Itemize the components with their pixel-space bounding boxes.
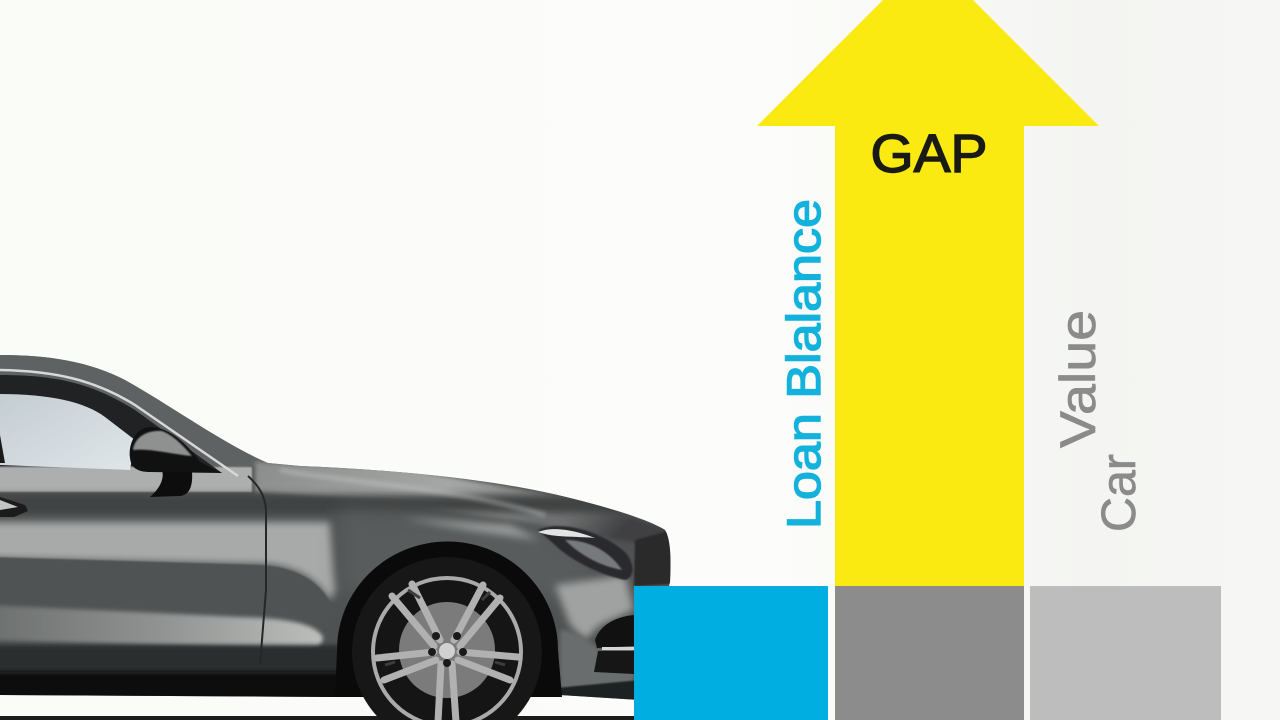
car body (0, 340, 680, 710)
value label: Value (1050, 310, 1106, 448)
lower dark sill (0, 645, 340, 675)
bumper shadow (561, 680, 634, 700)
headlight (538, 526, 633, 580)
arch top light sweep (400, 518, 540, 540)
yellow up arrow (757, 0, 1099, 586)
hood crease (280, 470, 545, 515)
nose dark (634, 530, 672, 586)
upper door light band (0, 522, 336, 600)
lug nuts (428, 632, 467, 667)
front lower panel (560, 630, 634, 690)
hood surface (255, 462, 670, 548)
window pillar (0, 435, 5, 463)
light gray block: car value (1030, 586, 1221, 720)
ground line (0, 716, 634, 720)
rim (373, 578, 521, 720)
loan balance label: Loan Blalance (777, 199, 830, 529)
lower grille (594, 615, 634, 674)
window frame (0, 375, 222, 473)
door handle (0, 497, 28, 517)
hood arch shadow (340, 510, 600, 600)
roof (0, 352, 270, 470)
front wheel (352, 557, 542, 720)
front fender highlight (555, 575, 634, 640)
door line (248, 476, 266, 665)
shoulder shadow (0, 495, 670, 513)
chrome trim (0, 370, 238, 476)
shoulder highlight (0, 467, 252, 492)
lower door light band (0, 605, 323, 650)
side window (0, 394, 135, 470)
gray block: below gap (835, 586, 1024, 720)
wing mirror (130, 427, 222, 497)
spokes (377, 584, 518, 720)
mid door dark band (0, 556, 329, 602)
car illustration (0, 340, 680, 720)
wheel arch (335, 542, 562, 697)
GAP label: GAP (870, 124, 988, 184)
blue block: loan balance (634, 586, 828, 720)
car label: Car (1093, 454, 1146, 532)
brake disc (399, 602, 495, 698)
tire (352, 557, 542, 720)
hub (439, 643, 455, 659)
